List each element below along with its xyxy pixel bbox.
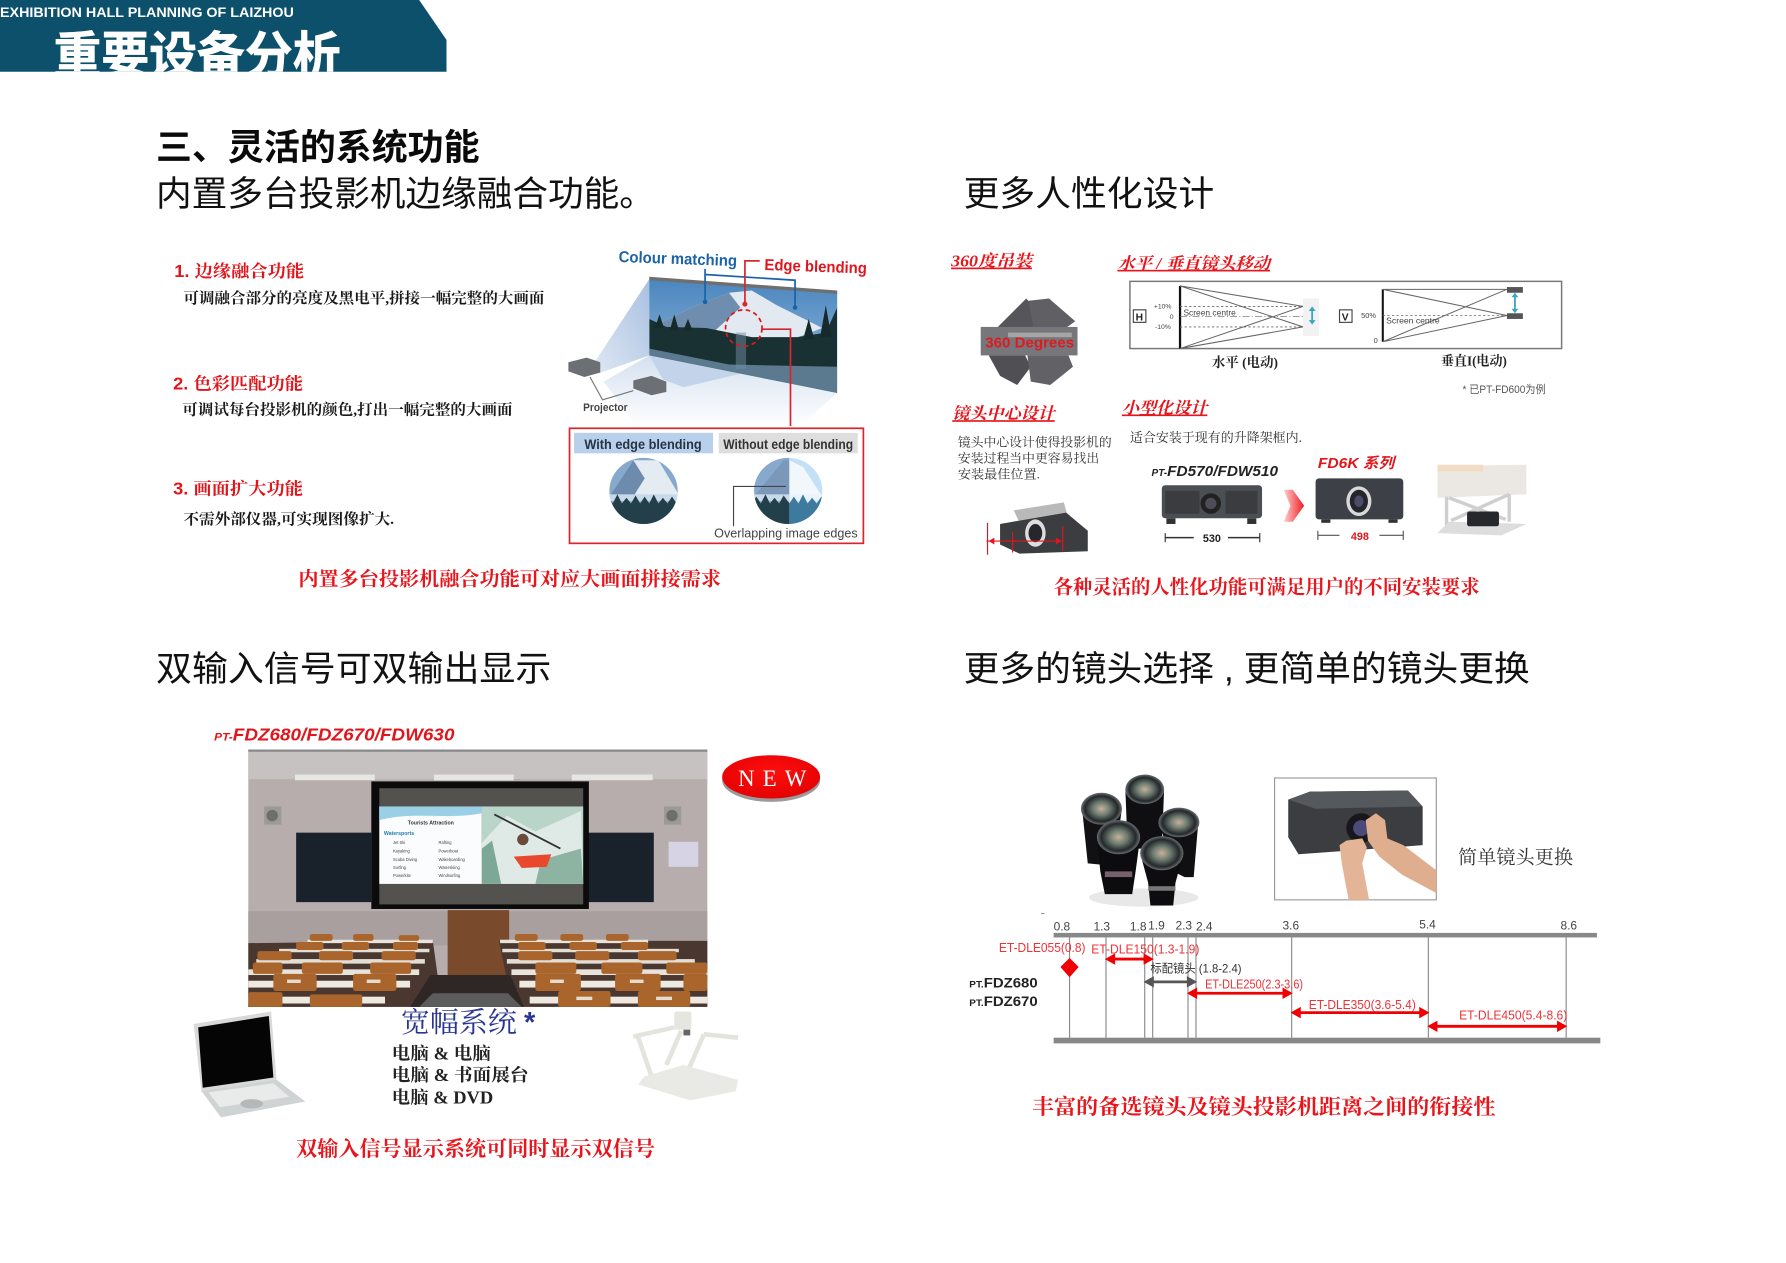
slide text: Powerboat [439, 849, 459, 854]
lens ET-DLE250: ET-DLE250(2.3-3.6) [1205, 978, 1303, 992]
centre lens description: 安装过程当中更容易找出 [958, 450, 1099, 465]
vertical shift: 50% [1361, 311, 1376, 320]
icon: ceiling lift [1437, 465, 1526, 535]
vertical shift: Screen centre [1386, 316, 1440, 326]
vertical shift [1340, 287, 1523, 345]
overlap label: Overlapping image edges [714, 527, 858, 541]
icon: FD570 projector [1162, 485, 1262, 524]
icon: FD6K projector [1316, 478, 1403, 523]
image: lenses group [1081, 775, 1199, 907]
with blending label: With edge blending [584, 437, 702, 452]
header title: 重要设备分析 [54, 28, 341, 84]
dimension 498: 498 [1351, 531, 1369, 543]
panel caption: 各种灵活的人性化功能可满足用户的不同安装要求 [1054, 576, 1480, 598]
panel: dual input [156, 650, 820, 1161]
label: easy lens change: 简单镜头更换 [1458, 846, 1573, 868]
sub heading 360: 360度吊装 [950, 252, 1035, 271]
horizontal shift: 0 [1170, 314, 1174, 321]
vertical shift: 0 [1374, 336, 1378, 345]
slide text [384, 821, 465, 878]
comparison box: with and without edge blending [570, 428, 863, 543]
standard lens [1144, 961, 1242, 988]
throw ratio ticks: 5.4 [1419, 917, 1436, 931]
dual-system title: 宽幅系统 * [401, 1007, 536, 1039]
model labels: PT.FDZ680 [969, 976, 1038, 991]
throw ratio ticks: 3.6 [1283, 918, 1300, 932]
colour matching pointer [705, 269, 795, 309]
input combinations: 电脑 & 书面展台 [392, 1065, 530, 1085]
sub heading centre lens: 镜头中心设计 [952, 404, 1057, 423]
panel heading: 更多的镜头选择 , 更简单的镜头更换 [964, 650, 1530, 689]
model footnote: * 已PT-FD600为例 [1463, 382, 1546, 396]
panel: lens options [964, 650, 1600, 1119]
diagram: projectors and blended screen [568, 249, 867, 428]
centre lens description: 镜头中心设计使得投影机的 [958, 435, 1112, 450]
lens ET-DLE350 [1291, 998, 1429, 1018]
classroom photo [248, 750, 707, 1007]
horizontal shift: H [1136, 313, 1143, 324]
projection screen [371, 781, 589, 909]
panel heading: 内置多台投影机边缘融合功能。 [156, 175, 655, 214]
slide text: Wakeboarding [439, 857, 465, 862]
sub heading lens shift: 水平 / 垂直镜头移动 [1117, 254, 1273, 273]
label horizontal: 水平 (电动) [1212, 354, 1278, 371]
throw ratio ticks: 2.3 [1175, 918, 1192, 932]
icon: document camera [633, 1011, 738, 1100]
projector icons [568, 358, 666, 400]
icon: centre lens projector [986, 502, 1088, 555]
edge blending pointer [745, 261, 790, 426]
lens ET-DLE150: ET-DLE150(1.3-1.9) [1091, 942, 1199, 956]
photo: changing the lens [1275, 778, 1436, 900]
slide text: Scuba Diving [393, 857, 418, 862]
centre lens description [958, 435, 1112, 481]
lens ET-DLE450 [1427, 1008, 1567, 1032]
panel heading: 双输入信号可双输出显示 [156, 650, 551, 689]
feature 2 title: 2. 色彩匹配功能 [173, 374, 303, 394]
slide text: Rafting [439, 840, 452, 845]
slide text: Windsurfing [439, 873, 461, 878]
throw ratio ticks: 2.4 [1196, 920, 1213, 934]
slide text: Jet Ski [393, 840, 405, 845]
horizontal shift: +10% [1154, 304, 1171, 311]
slide text: Watersports [384, 831, 414, 837]
model label FD570: PT-FD570/FDW510 [1152, 464, 1279, 480]
lens ET-DLE055: ET-DLE055(0.8) [999, 941, 1085, 955]
overlap leader line [734, 486, 786, 526]
lens throw chart [969, 914, 1600, 1043]
throw ratio ticks: 8.6 [1560, 918, 1577, 932]
dimension 530: 530 [1203, 533, 1221, 545]
slide text: Tourists Attraction [408, 821, 454, 827]
lens ET-DLE450: ET-DLE450(5.4-8.6) [1459, 1008, 1567, 1022]
360 degrees label: 360 Degrees [985, 335, 1074, 351]
input combinations [392, 1043, 530, 1108]
panel caption: 内置多台投影机融合功能可对应大画面拼接需求 [298, 567, 721, 590]
label vertical: 垂直I(电动) [1441, 353, 1507, 370]
throw ratio ticks: 1.8 [1130, 920, 1147, 934]
lens ET-DLE150 [1091, 942, 1199, 965]
model label: PT-FDZ680/FDZ670/FDW630 [214, 725, 455, 744]
arrow: chevron to smaller model [1284, 490, 1304, 522]
horizontal shift: -10% [1155, 324, 1171, 331]
label: edge blending: Edge blending [764, 257, 867, 278]
image: blended mountain [609, 458, 678, 524]
model labels [969, 976, 1038, 1009]
throw ratio ticks [1054, 917, 1577, 934]
centre lens description: 安装最佳位置. [958, 466, 1040, 481]
horizontal shift: Screen centre [1183, 308, 1236, 318]
feature 3 title: 3. 画面扩大功能 [173, 478, 303, 498]
icon: laptop [194, 1011, 305, 1117]
lens shift diagram [1130, 281, 1562, 349]
input combinations: 电脑 & DVD [392, 1088, 493, 1108]
projector label: Projector [583, 402, 628, 414]
sub heading compact: 小型化设计 [1122, 398, 1210, 417]
icon: 360 degree projector cluster [981, 298, 1078, 385]
panel: ergonomic design [950, 175, 1562, 598]
badge: NEW [722, 755, 820, 802]
without blending label: Without edge blending [723, 437, 853, 452]
feature 3 text: 不需外部仪器,可实现图像扩大. [183, 510, 394, 528]
throw ratio ticks: 1.9 [1148, 918, 1165, 932]
panel: edge blending [156, 175, 867, 590]
feature 1 text: 可调融合部分的亮度及黑电平,拼接一幅完整的大画面 [183, 289, 545, 307]
compact description: 适合安装于现有的升降架框内. [1130, 429, 1302, 445]
dimension 498 [1318, 531, 1403, 543]
throw ratio ticks: 0.8 [1054, 920, 1071, 934]
lens ET-DLE055 [999, 941, 1085, 977]
badge: NEW: NEW [738, 766, 807, 791]
panel caption: 丰富的备选镜头及镜头投影机距离之间的衔接性 [1032, 1094, 1496, 1119]
slide text: Waterskiing [439, 865, 460, 870]
header banner [0, 0, 446, 72]
classroom seats [248, 934, 707, 1007]
standard lens: 标配镜头 (1.8-2.4) [1150, 961, 1242, 976]
section heading: 三、灵活的系统功能 [156, 127, 480, 167]
model labels: PT.FDZ670 [969, 994, 1038, 1009]
slide text: Surfing [393, 865, 407, 870]
image: unblended mountain [754, 458, 822, 524]
slide text: Powerkite [393, 873, 412, 878]
feature 2 text: 可调试每台投影机的颜色,打出一幅完整的大画面 [182, 401, 513, 419]
horizontal shift [1133, 286, 1319, 349]
slide text: Kayaking [393, 849, 411, 854]
model label FD6K: FD6K 系列 [1318, 455, 1398, 472]
panel heading: 更多人性化设计 [964, 175, 1214, 214]
dimension 530 [1165, 533, 1260, 545]
vertical shift: V [1342, 313, 1349, 324]
panel caption: 双输入信号显示系统可同时显示双信号 [296, 1137, 655, 1161]
lens ET-DLE250 [1187, 978, 1303, 999]
throw ratio ticks: 1.3 [1093, 920, 1110, 934]
header English subtitle: EXHIBITION HALL PLANNING OF LAIZHOU [0, 5, 294, 21]
label: colour matching: Colour matching [618, 249, 737, 270]
feature 1 title: 1. 边缘融合功能 [174, 261, 304, 281]
lens ET-DLE350: ET-DLE350(3.6-5.4) [1309, 998, 1416, 1012]
input combinations: 电脑 & 电脑 [392, 1043, 491, 1063]
